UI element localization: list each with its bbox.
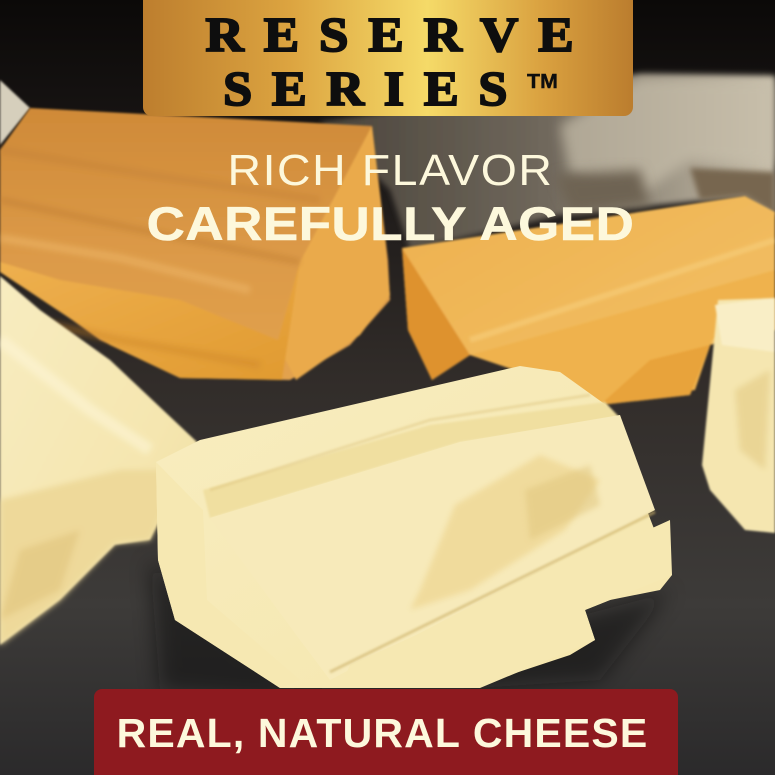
main white cheese block xyxy=(156,366,672,688)
right white block xyxy=(702,298,775,533)
left white block xyxy=(0,276,197,645)
badge text: Reserve: RESERVE xyxy=(206,7,593,62)
soft shadows xyxy=(150,560,670,700)
badge text: Series: SERIESTM xyxy=(223,61,558,116)
headline: carefully aged: CAREFULLY AGED xyxy=(147,197,634,250)
banner: real, natural cheese: REAL, NATURAL CHEESE xyxy=(117,710,648,756)
background pale block xyxy=(0,74,775,250)
right orange block xyxy=(402,196,775,405)
badge: Reserve Series xyxy=(143,0,633,116)
headline: rich flavor: RICH FLAVOR xyxy=(227,146,554,195)
banner: real, natural cheese xyxy=(94,689,678,775)
left orange block xyxy=(0,108,390,380)
